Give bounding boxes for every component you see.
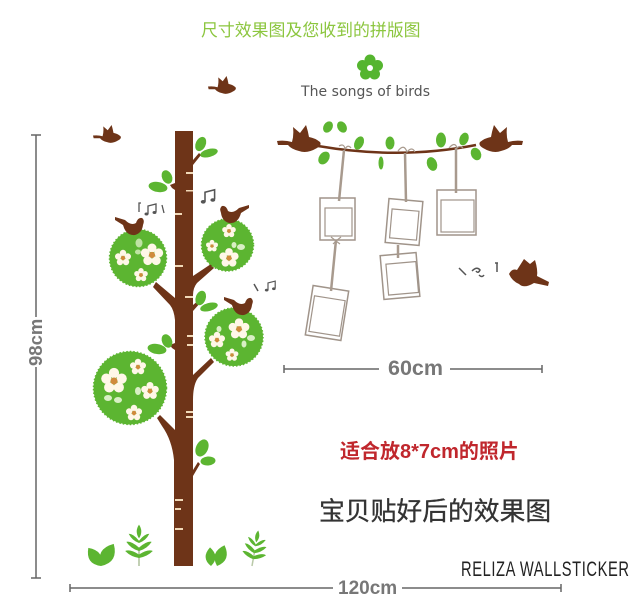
dimension: 98cm bbox=[25, 135, 46, 578]
music notes bbox=[139, 190, 276, 291]
perched birds bbox=[115, 205, 253, 315]
title: 尺寸效果图及您收到的拼版图 bbox=[201, 21, 421, 40]
icon: singing bird right bbox=[459, 259, 549, 286]
trunk marks bbox=[175, 172, 193, 530]
tree canopy 1 bbox=[110, 230, 166, 286]
heading: songs of birds: The songs of birds bbox=[300, 84, 430, 100]
dimension: 120cm bbox=[70, 578, 561, 599]
dimension: 98cm: 98cm bbox=[25, 319, 46, 366]
caption: 宝贝贴好后的效果图 bbox=[319, 497, 551, 526]
icon: flying bird left bbox=[93, 125, 121, 143]
dimension: 120cm: 120cm bbox=[338, 578, 397, 599]
dimension: 60cm bbox=[284, 356, 542, 380]
string bows bbox=[331, 144, 463, 244]
branch birds bbox=[277, 125, 321, 152]
grass bbox=[84, 525, 270, 569]
icon: flying bird top bbox=[208, 76, 236, 94]
red note: 适合放8*7cm的照片 bbox=[340, 440, 519, 463]
branch bbox=[318, 145, 476, 153]
watermark: RELIZA WALLSTICKER bbox=[461, 557, 629, 581]
tree trunk with branches bbox=[153, 131, 214, 566]
tree canopy 2 bbox=[202, 219, 254, 271]
tree canopy 3 bbox=[205, 308, 263, 366]
dimension: 60cm: 60cm bbox=[388, 356, 443, 380]
hanging photo display bbox=[277, 120, 523, 341]
strings bbox=[331, 148, 456, 291]
branch leaves bbox=[316, 120, 483, 172]
trunk leaves bbox=[147, 135, 219, 466]
icon: green flower bbox=[357, 54, 383, 80]
tree canopy 4 bbox=[94, 352, 166, 424]
photo frames bbox=[305, 190, 476, 341]
